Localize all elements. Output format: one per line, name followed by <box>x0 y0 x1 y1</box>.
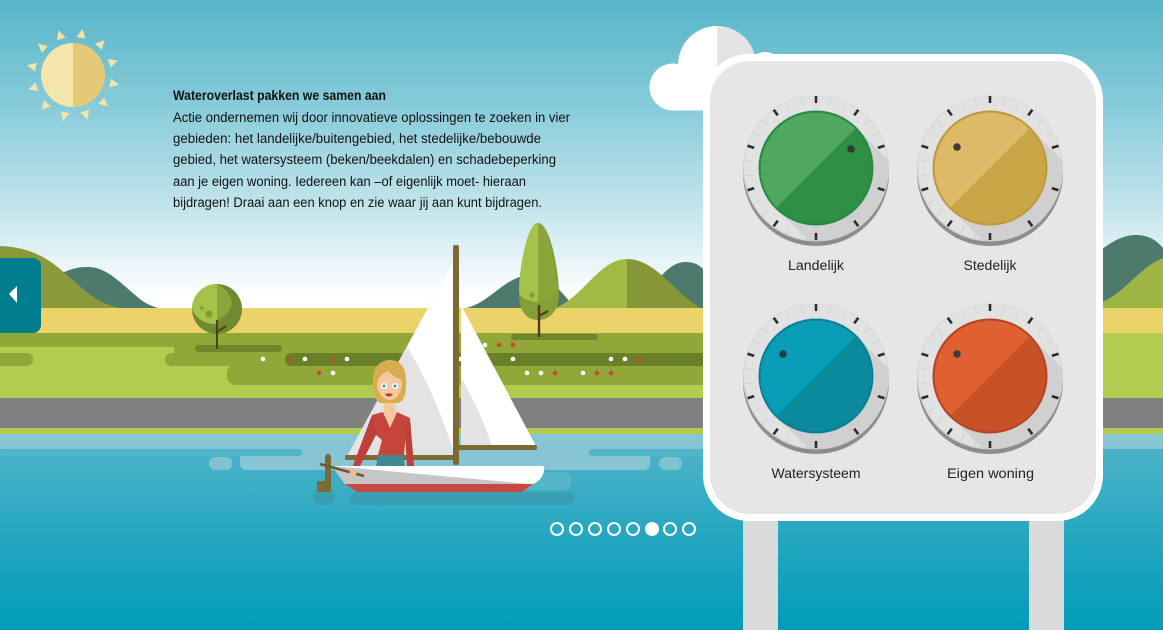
road <box>0 398 1163 428</box>
hills centre <box>466 259 710 308</box>
dial: Watersysteem <box>743 304 956 516</box>
jib sail <box>461 305 536 446</box>
woman sailor <box>352 360 414 470</box>
body text: aan je eigen woning. Iedereen kan –of eigenlijk moet- hieraan <box>173 174 526 189</box>
rudder and tiller <box>317 454 364 492</box>
dial: Landelijk <box>743 96 956 308</box>
icon: left arrow <box>9 286 17 303</box>
yellow field <box>0 308 1163 333</box>
heading: Wateroverlast pakken we samen aan <box>173 88 386 103</box>
sailboat <box>317 245 544 492</box>
sky background <box>0 0 1163 310</box>
intro text <box>173 88 570 210</box>
green land <box>0 333 1163 398</box>
label: Watersysteem: Watersysteem <box>772 465 860 481</box>
hills left <box>0 246 158 308</box>
hills right <box>1090 235 1163 308</box>
back button <box>0 258 41 333</box>
sun <box>26 28 120 122</box>
water <box>0 434 1163 630</box>
dial: Stedelijk <box>917 96 1130 308</box>
main sail <box>347 258 455 456</box>
body text: gebieden: het landelijke/buitengebied, het stedelijke/bebouwde <box>173 131 541 146</box>
cloud <box>650 26 783 110</box>
body text <box>173 110 570 210</box>
label: Landelijk: Landelijk <box>788 257 845 273</box>
label: Stedelijk: Stedelijk <box>964 257 1017 273</box>
round tree <box>192 284 282 352</box>
body text: bijdragen! Draai aan een knop en zie waar jij aan kunt bijdragen. <box>173 195 542 210</box>
mast and booms <box>345 245 537 465</box>
road verge <box>0 428 1163 434</box>
body text: Actie ondernemen wij door innovatieve oplossingen te zoeken in vier <box>173 110 570 125</box>
label: Eigen woning: Eigen woning <box>947 465 1034 481</box>
body text: gebied, het watersysteem (beken/beekdalen) en schadebeperking <box>173 152 556 167</box>
sign panel <box>703 54 1130 521</box>
dial: Eigen woning <box>917 304 1130 516</box>
hull <box>332 466 544 492</box>
pagination dots <box>551 523 695 535</box>
flower dots <box>261 343 641 375</box>
tall tree <box>511 223 598 340</box>
sign posts <box>743 515 1064 630</box>
